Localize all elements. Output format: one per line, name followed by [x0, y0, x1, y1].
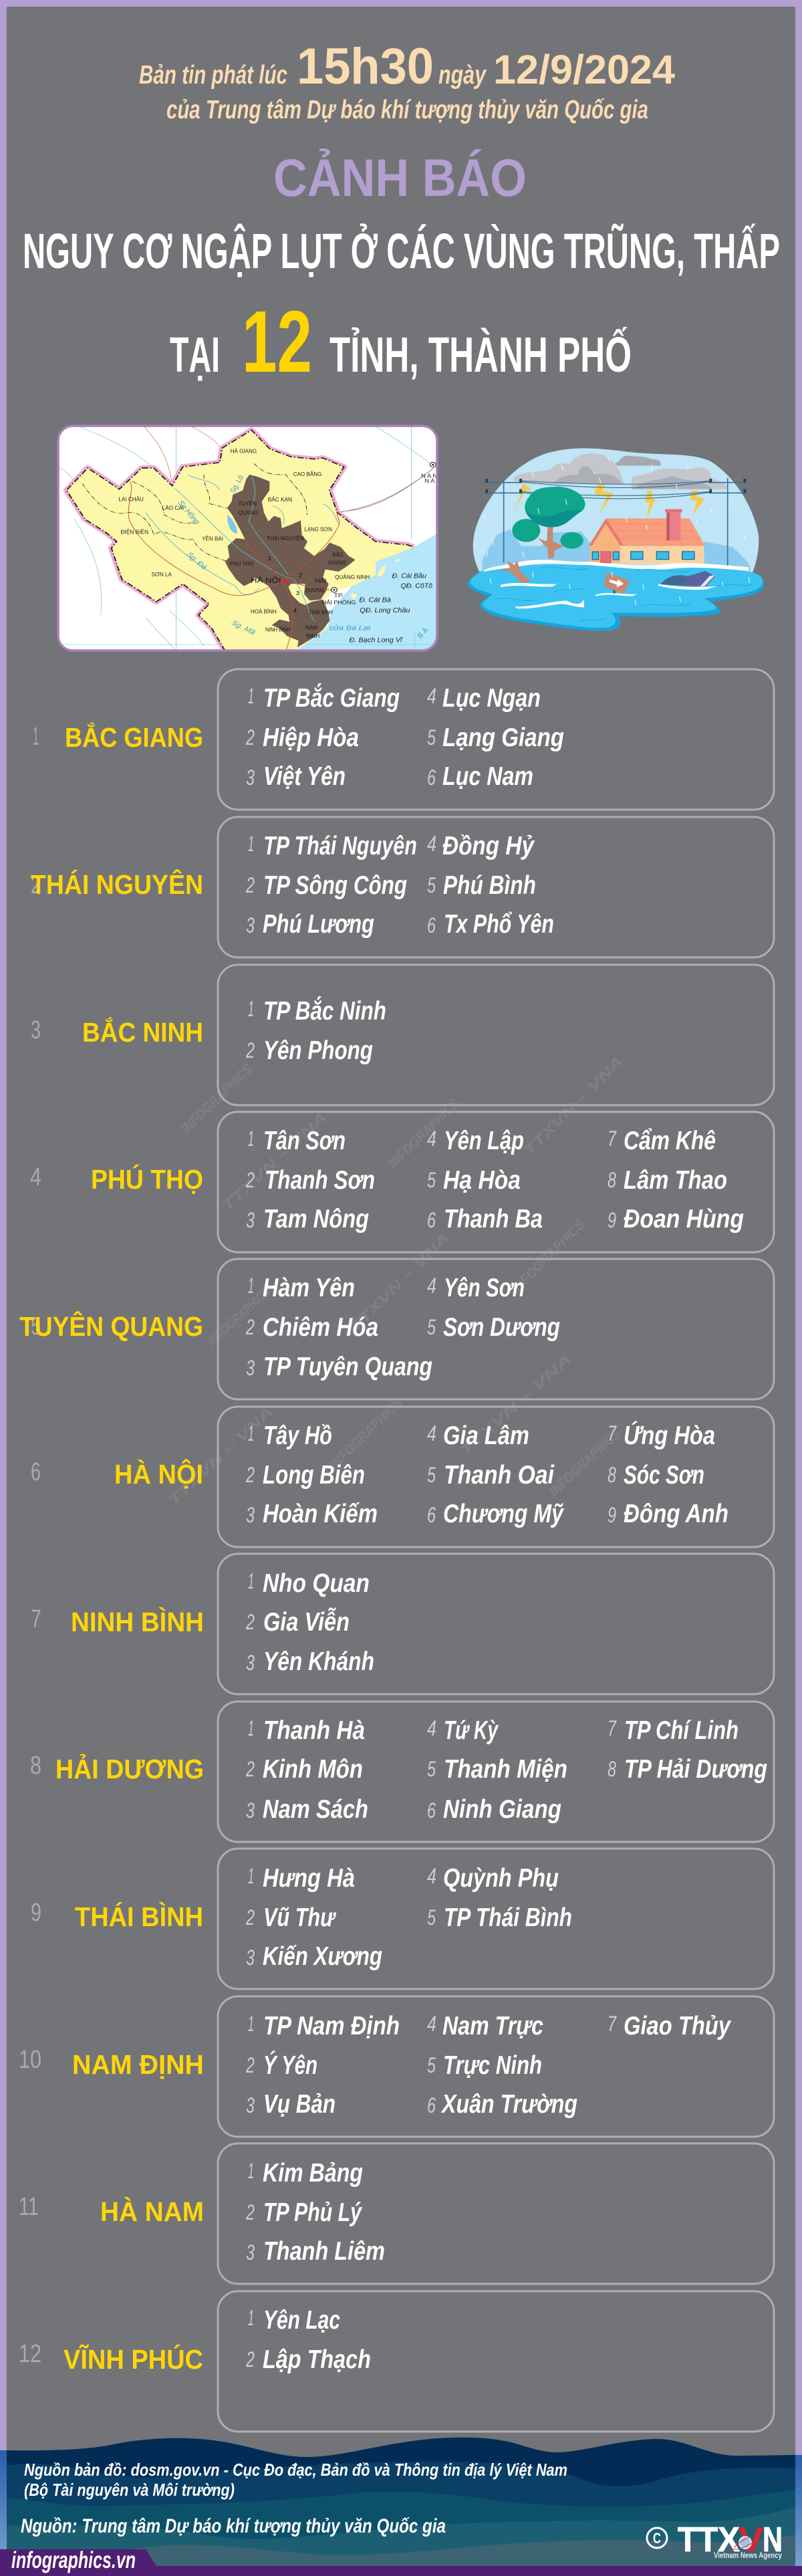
district list: Yên Phong: [263, 1036, 373, 1065]
district list: Hiệp Hòa: [263, 723, 359, 752]
district list: Hưng Hà: [263, 1864, 355, 1893]
map of northern Vietnam: NAM: [305, 624, 317, 631]
district list: 1: [248, 684, 254, 708]
map of northern Vietnam: 1: [268, 556, 271, 562]
map of northern Vietnam: HẢI PHÒNG: [322, 599, 356, 606]
rank number: 2: [31, 871, 41, 899]
district list: 4: [427, 832, 436, 856]
icon: sky: [473, 449, 759, 577]
district list: Yên Khánh: [263, 1647, 374, 1676]
district list: 2: [245, 1168, 255, 1192]
source: map: [24, 2460, 567, 2500]
district list: 1: [248, 1127, 254, 1151]
footer: wave background: [0, 2438, 802, 2569]
map of northern Vietnam: THÁI NGUYÊN: [267, 536, 304, 542]
source: data: Nguồn: Trung tâm Dự báo khí tượng thủy văn Quốc gia: [21, 2515, 446, 2537]
icon: rain: [483, 457, 750, 605]
district list: 1: [248, 997, 254, 1021]
district list: 8: [608, 1757, 616, 1781]
map of northern Vietnam: [56, 426, 439, 652]
district list: Kinh Môn: [263, 1755, 363, 1784]
district list: Hạ Hòa: [443, 1166, 521, 1195]
province name: HẢI DƯƠNG: [55, 1754, 204, 1784]
source: map: Nguồn bản đồ: dosm.gov.vn - Cục Đo đạc, Bản đồ và Thông tin địa lý Việt Nam: [24, 2460, 567, 2480]
district list: Thanh Liêm: [263, 2237, 385, 2266]
district list: Yên Sơn: [444, 1274, 525, 1302]
icon: storm clouds: [513, 453, 726, 489]
row 10: Nam Định: [19, 1996, 774, 2137]
rank number: 8: [30, 1752, 41, 1780]
district list: Ứng Hòa: [624, 1421, 715, 1450]
district list: Ninh Giang: [443, 1795, 561, 1824]
district list: 2: [245, 725, 255, 749]
province name: PHÚ THỌ: [91, 1164, 203, 1195]
panel: districts: [218, 669, 774, 810]
district list: 4: [427, 1274, 436, 1298]
district list: [245, 683, 564, 791]
map of northern Vietnam: BẮC: [332, 552, 344, 558]
district list: 4: [427, 1716, 436, 1740]
district list: [245, 2306, 371, 2374]
district list: [245, 1569, 374, 1676]
district list: 8: [608, 1168, 616, 1192]
district list: Quỳnh Phụ: [443, 1864, 559, 1893]
district list: Đông Anh: [624, 1500, 728, 1528]
district list: 7: [608, 1716, 617, 1740]
map of northern Vietnam: LÀO CAI: [162, 505, 184, 511]
district list: 4: [427, 1421, 436, 1445]
district list: 4: [427, 1127, 436, 1151]
province name: NAM ĐỊNH: [72, 2049, 204, 2080]
district list: 3: [246, 1798, 255, 1823]
district list: 7: [608, 1421, 617, 1445]
logo: TTXVN: TTX: [678, 2521, 740, 2559]
header: issuing agency: của Trung tâm Dự báo khí tượng thủy văn Quốc gia: [166, 96, 648, 124]
district list: Phú Bình: [443, 871, 536, 900]
district list: 2: [245, 2347, 255, 2371]
district list: 5: [427, 1315, 436, 1339]
district list: Gia Lâm: [443, 1421, 529, 1450]
watermark: TTXVN – VNA: [166, 1404, 276, 1509]
row 9: Thái Bình: [31, 1849, 774, 1989]
district list: TP Thái Bình: [444, 1903, 572, 1932]
map of northern Vietnam: Đ. Cát Bà: [360, 596, 391, 604]
map of northern Vietnam: Đ. Cái Bầu: [392, 572, 426, 580]
province name: TUYÊN QUANG: [19, 1311, 203, 1342]
district list: 9: [608, 1208, 616, 1232]
rank number: 6: [31, 1458, 41, 1486]
district list: 3: [246, 1651, 255, 1675]
district list: 6: [427, 766, 436, 790]
district list: 1: [248, 2159, 254, 2183]
district list: Trực Ninh: [443, 2051, 542, 2080]
district list: 2: [245, 2200, 255, 2224]
rank number: 11: [19, 2193, 39, 2221]
district list: Tân Sơn: [263, 1127, 346, 1155]
logo: TTXVN: [647, 2521, 783, 2560]
district list: 3: [246, 2240, 255, 2264]
district list: Thanh Hà: [263, 1716, 365, 1745]
bottom bar: [0, 2566, 802, 2576]
rank number: 3: [31, 1016, 41, 1044]
rank number: 12: [19, 2340, 41, 2368]
rank number: 10: [19, 2046, 41, 2074]
district list: Yên Lạc: [263, 2306, 340, 2335]
title: 12 provinces: [170, 292, 632, 390]
district list: 4: [427, 2012, 436, 2036]
district list: 3: [246, 766, 255, 790]
district list: Chương Mỹ: [443, 1500, 565, 1528]
district list: 2: [245, 2053, 255, 2077]
district list: 7: [608, 1127, 617, 1151]
district list: Ý Yên: [263, 2051, 317, 2080]
map of northern Vietnam: YÊN BÁI: [202, 536, 223, 542]
district list: TP Bắc Giang: [263, 683, 400, 713]
district list: Hoàn Kiếm: [263, 1500, 378, 1528]
header: bulletin time: 12/9/2024: [493, 47, 675, 92]
watermark: [166, 1054, 626, 1509]
district list: [245, 996, 386, 1065]
map of northern Vietnam: Đ. Bạch Long Vĩ: [350, 636, 403, 644]
district list: 3: [246, 2093, 255, 2117]
district list: Sơn Dương: [443, 1313, 560, 1342]
watermark: INFOGRAPHICS: [385, 1096, 462, 1171]
map of northern Vietnam: N A: [424, 478, 435, 484]
district list: 2: [245, 873, 255, 897]
district list: 1: [248, 2012, 254, 2036]
panel: districts: [218, 1112, 774, 1252]
district list: 3: [246, 913, 255, 937]
title: 12 provinces: 12: [242, 292, 312, 390]
map of northern Vietnam: THÁI BÌNH: [309, 609, 333, 616]
province name: THÁI NGUYÊN: [31, 869, 203, 900]
map of northern Vietnam: QĐ. CôTô: [401, 582, 432, 590]
map of northern Vietnam: PHÚ THỌ: [230, 561, 253, 568]
icon: house: [589, 509, 705, 564]
province name: HÀ NAM: [100, 2196, 204, 2227]
district list: Hàm Yên: [263, 1274, 355, 1302]
district list: Lâm Thao: [624, 1166, 727, 1195]
district list: Kim Bảng: [263, 2159, 363, 2188]
map of northern Vietnam: LAI CHÂU: [118, 496, 144, 503]
icon: power poles and wires: [485, 478, 747, 566]
map of northern Vietnam: HÀ GIANG: [231, 448, 257, 455]
district list: TP Chí Linh: [624, 1716, 739, 1745]
map of northern Vietnam: ĐIỆN BIÊN: [121, 529, 148, 536]
district list: TP Tuyên Quang: [263, 1353, 432, 1381]
map of northern Vietnam: NINH BÌNH: [265, 626, 290, 633]
district list: 6: [427, 913, 436, 937]
title: 12 provinces: TỈNH, THÀNH PHỐ: [329, 327, 632, 382]
row 7: Ninh Bình: [31, 1554, 774, 1694]
district list: Thanh Ba: [444, 1205, 543, 1234]
district list: 6: [427, 1503, 436, 1527]
district list: 6: [427, 1798, 436, 1823]
province name: BẮC GIANG: [65, 722, 203, 753]
map of northern Vietnam: HÀ NỘI: [251, 577, 281, 584]
district list: 5: [427, 725, 436, 749]
panel: districts: [218, 1849, 774, 1989]
district list: [245, 1127, 744, 1234]
map of northern Vietnam: B Á: [415, 626, 430, 640]
map of northern Vietnam: TP.: [334, 592, 344, 599]
district list: [245, 1274, 560, 1381]
map of northern Vietnam: Sg Hồng: [176, 499, 201, 526]
panel: districts: [218, 1407, 774, 1547]
panel: districts: [218, 2143, 774, 2284]
panel: districts: [218, 2291, 774, 2432]
district list: Nho Quan: [263, 1569, 370, 1598]
watermark: TTXVN – VNA: [347, 1230, 452, 1336]
header: bulletin time: [139, 38, 675, 95]
district list: 1: [248, 1421, 254, 1445]
map of northern Vietnam: TUYÊN: [238, 501, 257, 507]
icon: submerged car: [660, 571, 715, 587]
map of northern Vietnam: DƯƠNG: [305, 587, 325, 594]
district list: 3: [246, 1946, 255, 1970]
district list: TP Sông Công: [263, 871, 407, 900]
district list: Xuân Trường: [440, 2090, 577, 2119]
map of northern Vietnam: cửa Ba Lạt: [329, 624, 371, 632]
district list: Tây Hồ: [263, 1421, 332, 1450]
district list: 5: [427, 1463, 436, 1487]
district list: [245, 1864, 572, 1971]
district list: Tứ Kỳ: [444, 1716, 499, 1745]
watermark: INFOGRAPHICS: [326, 1395, 406, 1473]
panel: districts: [218, 1702, 774, 1842]
watermark: TTXVN – VNA: [521, 1054, 626, 1159]
district list: Tx Phổ Yên: [444, 910, 554, 939]
map of northern Vietnam: CAO BẰNG: [293, 471, 321, 478]
district list: TP Hải Dương: [624, 1755, 767, 1784]
icon: fallen tree: [500, 560, 531, 583]
district list: 4: [427, 1864, 436, 1888]
panel: districts: [218, 1259, 774, 1399]
map of northern Vietnam: SƠN LA: [152, 572, 172, 578]
icon: tree: [512, 487, 585, 558]
district list: 7: [608, 2012, 617, 2036]
map of northern Vietnam: LẠNG SƠN: [304, 526, 332, 533]
icon: road sign: [604, 573, 630, 594]
map of northern Vietnam: 3: [296, 590, 299, 597]
district list: Vũ Thư: [263, 1903, 336, 1932]
district list: [245, 1716, 767, 1824]
district list: Tam Nông: [263, 1205, 369, 1234]
province name: BẮC NINH: [82, 1017, 203, 1048]
rank number: 9: [31, 1899, 41, 1927]
district list: Nam Sách: [263, 1795, 368, 1824]
district list: 2: [245, 1463, 255, 1487]
row 1: Bắc Giang: 1: [33, 723, 39, 751]
watermark: INFOGRAPHICS: [547, 1426, 624, 1500]
district list: 5: [427, 873, 436, 897]
district list: 1: [248, 1274, 254, 1298]
watermark: TTXVN – VNA: [457, 1351, 575, 1459]
district list: Lạng Giang: [442, 723, 564, 752]
logo: TTXVN: C: [653, 2530, 661, 2547]
row 1: Bắc Giang: [33, 669, 774, 810]
district list: 5: [427, 1757, 436, 1781]
district list: 2: [245, 1757, 255, 1781]
map of northern Vietnam: 2: [299, 572, 302, 579]
district list: [245, 2012, 732, 2119]
panel: districts: [218, 965, 774, 1105]
icon: lightning bolts: [514, 483, 705, 518]
rank number: 4: [30, 1163, 41, 1191]
district list: 5: [427, 1168, 436, 1192]
row 4: Phú Thọ: [30, 1112, 774, 1252]
tab: infographics.vn: infographics.vn: [11, 2547, 136, 2573]
district list: Cẩm Khê: [624, 1127, 716, 1155]
district list: 1: [248, 1864, 254, 1888]
district list: Yên Lập: [444, 1127, 524, 1155]
map of northern Vietnam: 4: [293, 608, 297, 614]
rank number: 5: [31, 1312, 41, 1340]
district list: Chiêm Hóa: [263, 1313, 378, 1342]
rank number: 7: [31, 1605, 41, 1633]
district list: 1: [248, 832, 254, 856]
district list: 5: [427, 2053, 436, 2077]
district list: TP Phủ Lý: [263, 2198, 363, 2227]
map of northern Vietnam: Sg. Lô: [229, 474, 246, 494]
district list: Sóc Sơn: [624, 1461, 704, 1490]
district list: 2: [245, 1038, 255, 1062]
district list: Lục Nam: [442, 762, 533, 791]
district list: 1: [248, 1569, 254, 1593]
header: bulletin time: Bản tin phát lúc: [139, 61, 287, 90]
row 8: Hải Dương: [30, 1702, 774, 1842]
watermark: TTXVN – VNA: [219, 1109, 330, 1215]
map of northern Vietnam: QĐ. Long Châu: [360, 607, 410, 614]
district list: Thanh Oai: [444, 1461, 555, 1490]
row 2: Thái Nguyên: [31, 817, 774, 957]
watermark: INFOGRAPHICS: [508, 1217, 588, 1297]
district list: TP Nam Định: [263, 2012, 400, 2040]
map of northern Vietnam: Sg. Đà: [184, 551, 209, 571]
map of northern Vietnam: QUẢNG NINH: [335, 574, 370, 581]
row 11: Hà Nam: [19, 2143, 774, 2284]
panel: districts: [218, 1554, 774, 1694]
header: bulletin time: 15h30: [297, 38, 434, 95]
district list: 3: [246, 1208, 255, 1232]
district list: 2: [245, 1905, 255, 1929]
district list: 2: [245, 1610, 255, 1634]
row 6: Hà Nội: [31, 1407, 774, 1547]
district list: Đồng Hỷ: [442, 832, 535, 860]
icon: flood water: [468, 560, 764, 631]
district list: 1: [248, 2306, 254, 2330]
source: map: (Bộ Tài nguyên và Môi trường): [24, 2480, 235, 2500]
province name: NINH BÌNH: [71, 1607, 204, 1637]
panel: districts: [218, 817, 774, 957]
icon: hills: [483, 530, 751, 573]
map of northern Vietnam: QUANG: [238, 509, 258, 516]
map of northern Vietnam: HOÀ BÌNH: [251, 608, 277, 615]
header: bulletin time: ngày: [438, 61, 487, 90]
district list: 6: [427, 2093, 436, 2117]
district list: 6: [427, 1208, 436, 1232]
district list: 3: [246, 1503, 255, 1527]
district list: Kiến Xương: [263, 1942, 382, 1971]
district list: Lục Ngạn: [442, 684, 541, 713]
title: warning: CẢNH BÁO: [273, 148, 527, 207]
map of northern Vietnam: HẢI: [315, 577, 326, 584]
title: 12 provinces: TẠI: [170, 327, 220, 382]
map of northern Vietnam: GIANG: [328, 560, 346, 566]
illustration: flooded house: [468, 449, 764, 631]
logo: TTXVN: N: [763, 2521, 783, 2559]
district list: 9: [608, 1503, 616, 1527]
district list: Nam Trực: [442, 2012, 543, 2040]
province name: THÁI BÌNH: [75, 1901, 203, 1932]
row 12: Vĩnh Phúc: [19, 2291, 774, 2432]
province name: VĨNH PHÚC: [63, 2344, 203, 2375]
province name: HÀ NỘI: [114, 1459, 203, 1490]
district list: 4: [427, 684, 436, 708]
district list: [245, 832, 554, 939]
district list: TP Thái Nguyên: [263, 832, 417, 860]
row 3: Bắc Ninh: [31, 965, 774, 1105]
logo: TTXVN: V: [739, 2521, 763, 2559]
map of northern Vietnam: Sg. Mã: [230, 619, 257, 636]
map of northern Vietnam: ĐỊNH: [306, 633, 319, 640]
district list: Đoan Hùng: [624, 1205, 744, 1234]
district list: Thanh Miện: [444, 1755, 567, 1784]
district list: [245, 1421, 728, 1528]
map of northern Vietnam: N A N: [421, 473, 437, 479]
district list: Thanh Sơn: [265, 1166, 375, 1195]
panel: districts: [218, 1996, 774, 2137]
row 5: Tuyên Quang: [19, 1259, 774, 1399]
district list: Giao Thủy: [624, 2012, 732, 2040]
district list: [245, 2159, 385, 2266]
map of northern Vietnam: BẮC KẠN: [268, 497, 292, 503]
district list: Việt Yên: [263, 762, 346, 791]
district list: Lập Thạch: [263, 2345, 371, 2374]
district list: 5: [427, 1905, 436, 1929]
district list: 3: [246, 1356, 255, 1380]
watermark: INFOGRAPHICS: [205, 1285, 273, 1349]
district list: 1: [248, 1716, 254, 1740]
district list: Long Biên: [263, 1461, 365, 1490]
watermark: INFOGRAPHICS: [178, 1061, 255, 1137]
district list: 8: [608, 1463, 616, 1487]
district list: Gia Viễn: [263, 1607, 350, 1637]
district list: 2: [245, 1315, 255, 1339]
district list: Vụ Bản: [263, 2090, 336, 2119]
district list: TP Bắc Ninh: [263, 996, 386, 1026]
logo: TTXVN: Vietnam News Agency: [714, 2551, 782, 2560]
district list: Phú Lương: [263, 910, 374, 939]
